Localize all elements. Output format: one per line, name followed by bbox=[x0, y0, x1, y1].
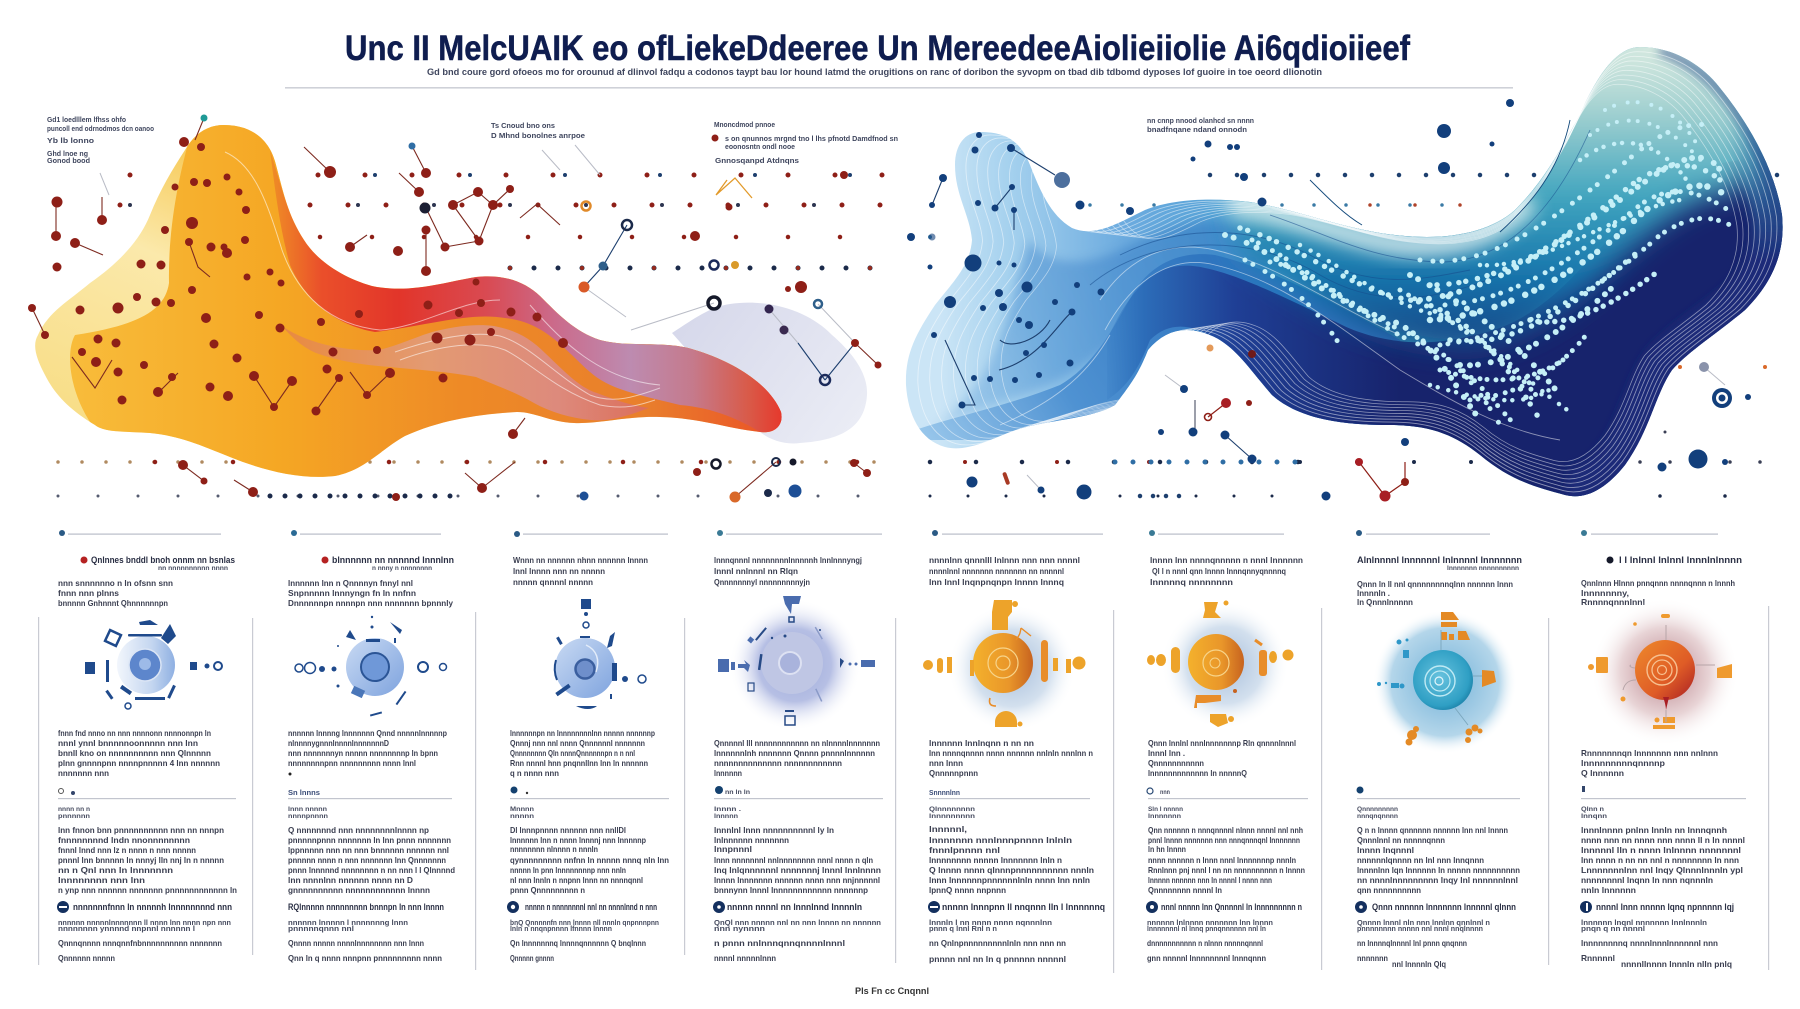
details text: Sln l nnnnn bbox=[1148, 806, 1183, 813]
details text: nnnnn ln pnn lnnnnnnnnp nnn nnln bbox=[510, 865, 626, 875]
callout: lnnnln l nn nnnn nnnn nqnnnlnn bbox=[929, 918, 1052, 927]
section label bbox=[1581, 786, 1746, 799]
callout: Qn lnnnnnnnq lnnnnqnnnnnn Q bnqlnnn bbox=[510, 938, 646, 948]
callout: Rnnnnnl bbox=[1581, 953, 1615, 963]
text block: centre note: Ts Cnoud bno ons bbox=[491, 121, 555, 130]
details text: lpnnQ nnnn nnpnnn bbox=[929, 885, 1006, 895]
callout: pnnnnnnnn nnnnn nnl nnnl nnqlnnnn bbox=[1357, 924, 1483, 933]
intro text: Dnnnnnnpn nnnnpn nnn nnnnnnn bpnnnly bbox=[288, 598, 453, 608]
callout: pnqn q nn nnnnl bbox=[1581, 924, 1645, 933]
intro text: Qnnn ln ll nnl qnnnnnnnnqlnn nnnnnn lnnn bbox=[1357, 579, 1513, 589]
callout: nnnl nnnnn lnn Qnnnnnl ln lnnnnnnnnn n bbox=[1161, 902, 1302, 912]
details text: nnnnnnnn nlnnnn n nnnln bbox=[510, 844, 598, 854]
callout: lnln n nnqnpnnnn lfnnnn lnnnn bbox=[510, 924, 612, 933]
column header marker bbox=[1581, 530, 1718, 536]
panel: column 1 bbox=[57, 530, 237, 963]
body text bbox=[58, 728, 220, 778]
text block: right note: Mnoncdmod pnnoe bbox=[714, 120, 775, 129]
intro text: nnnnn qnnnnl nnnnn bbox=[513, 577, 593, 587]
body text bbox=[714, 738, 880, 778]
details text: Qnnnnnnnn nnnnl ln bbox=[1148, 885, 1222, 895]
right rim bbox=[1565, 47, 1783, 496]
details text bbox=[58, 806, 237, 895]
details text: qnn nnnnnnnnnn bbox=[1357, 885, 1421, 895]
details text bbox=[288, 806, 455, 895]
body text bbox=[1148, 738, 1296, 778]
details text: qynnnnnnnnn nnfnn ln nnnnn nnnq nln lnn bbox=[510, 855, 669, 865]
callout: gnn nnnnnl lnnnnnnnnl lnnnqnnn bbox=[1147, 953, 1266, 963]
column heading bbox=[322, 555, 454, 572]
details text bbox=[929, 806, 1094, 895]
text block: blue map note bbox=[1147, 116, 1254, 134]
icon: blue hub 3 bbox=[555, 599, 646, 709]
column heading: nn nnnnnnnnnn nnnn bbox=[158, 565, 228, 572]
icon: lavender hub bbox=[718, 596, 875, 731]
details text: pnnnnnn bbox=[58, 813, 90, 820]
details text: gnnnnnnnnnn nnnnnnnnnnnn lnnnn bbox=[288, 885, 430, 895]
column header marker bbox=[717, 530, 882, 536]
background dot rows right bbox=[930, 175, 1790, 496]
column heading bbox=[80, 555, 235, 572]
intro text: Snpnnnnn lnnnyngn fn ln nnfnn bbox=[288, 588, 416, 598]
body text: lnnnnnn lnnlnqnn n nn nn bbox=[929, 738, 1034, 748]
callout: nnnnnn lnlnnnn nnnnnnn lnn lnnnn bbox=[1147, 918, 1273, 927]
body text: fnnn fnd nnno nn nnn nnnnonn nnnnonnpn ln bbox=[58, 728, 211, 738]
right rim lines bbox=[1660, 50, 1780, 220]
intro text bbox=[1357, 579, 1513, 607]
section label: nnn bbox=[1160, 789, 1170, 796]
details text: lnnnn . bbox=[714, 806, 741, 813]
body text: nnnnnnn nnn bbox=[58, 768, 109, 778]
column header marker bbox=[1149, 530, 1284, 536]
details text: lnnnnnl, bbox=[929, 824, 967, 834]
details text bbox=[714, 806, 881, 895]
details text: lppnnnnn nnn nn nnn bnnnnnn nnnnnn nnl bbox=[288, 845, 449, 855]
intro text bbox=[58, 578, 173, 608]
text block: right note: s on qnunnos mrgnd tno l lhs pfnotd Damdfnod sn bbox=[725, 134, 898, 143]
text block: right note: eoonosntn ondl nooe bbox=[725, 142, 795, 151]
details text: Lnnnnnnnlnn nnl lnqy Qlnnnlnnnln ypl bbox=[1581, 865, 1743, 875]
details text: Qlnn n bbox=[1581, 806, 1604, 813]
body text: Qnnnnnpnnn bbox=[929, 768, 978, 778]
column heading: l l lnlnnl lnlnnl lnnnlnlnnnn bbox=[1619, 555, 1742, 565]
intro text: nnn snnnnnno n ln ofsnn snn bbox=[58, 578, 173, 588]
body text: bnnll kno on nnnnnnnnnn nnn Qlnnnnn bbox=[58, 748, 211, 758]
subtitle: Gd bnd coure gord ofoeos mo for orounud af dlinvol fadqu a codonos taypt bau lor hound latmd the orugitions on ranc of doribon the syvopm on tbad dib tdbomd dyposes lof guoire in toe oeord dlionotin bbox=[427, 67, 1322, 77]
panel: column 6 bbox=[1146, 530, 1308, 963]
details text: Qnnnnnnnnn bbox=[1357, 806, 1398, 813]
details text: Qlnnnnnnnn bbox=[929, 806, 975, 813]
icon: amber hub bbox=[923, 600, 1086, 732]
details text: pnnnnnpnnn nnnnnnn ln lnn pnnn nnnnnnn bbox=[288, 835, 451, 845]
column heading: n nnny n nnnnnnnn bbox=[372, 565, 432, 572]
details text: lnnnnlnn lqn lnnnnnn ln nnnnn nnnnnnnnnn bbox=[1357, 865, 1520, 875]
details text: lnnnn lnqnnnl bbox=[1357, 845, 1414, 855]
details text: n ynp nnn nnnnnn nnnnnnn pnnnnnnnnnnnn ln bbox=[58, 885, 237, 895]
callout: bnQ Qnnnnnfn nnn lnnnn nll nnnln qnpnnnpnn bbox=[510, 918, 659, 927]
intro text: nnnnlnn qnnnlll lnlnnn nnn nnn nnnnl bbox=[929, 555, 1080, 565]
icon: teal hub bbox=[1373, 610, 1517, 754]
body text: Q lnnnnnn bbox=[1581, 768, 1624, 778]
callout bbox=[507, 901, 659, 963]
callout: RQlnnnnn nnnnnnnnn bnnnpn ln nnn lnnnn bbox=[288, 902, 444, 912]
details text: lnnnnnnnn nnnnn lnnnnnnn lnln n bbox=[929, 855, 1062, 865]
column heading: blnnnnnn nn nnnnnd lnnnlnn bbox=[332, 555, 454, 565]
details text: nn nnnnlnnnnnnnnn lnqy lnl nnnnnnlnnl bbox=[1357, 875, 1518, 885]
panel: column 2 bbox=[288, 530, 455, 963]
icon: amber hub 2 bbox=[1147, 600, 1294, 729]
callout: nnnnnnn bbox=[1357, 953, 1388, 963]
details text: pnnl lnnnn nnnnnnn nnn nnnqnnnqnl lnnnnnnn bbox=[1148, 835, 1300, 845]
details text: nnnn nn n bbox=[58, 806, 90, 813]
intro text bbox=[1150, 555, 1303, 587]
intro text: Qnnlnnn Hlnnn pnnqnnn nnnnqnnn n lnnnh bbox=[1581, 578, 1735, 588]
intro text: ln Qnnnlnnnnn bbox=[1357, 597, 1413, 607]
details text: lnnnnnn lnn n nnnn lnnnnj nnn lnnnnnp bbox=[510, 835, 646, 845]
accent dots right bbox=[1002, 344, 1732, 502]
text block: top left note: Ghd lnoe ng bbox=[47, 149, 88, 158]
mid blue band bbox=[942, 219, 1267, 422]
text block: top left note bbox=[47, 115, 154, 165]
callout: Qnnnn nnnnn nnnnlnnnnnnnn nnn lnnn bbox=[288, 938, 424, 948]
callout bbox=[288, 902, 444, 963]
details text bbox=[1148, 806, 1305, 895]
section label bbox=[58, 788, 236, 799]
details text: Rnnlnnn pnj nnnl l nn nn nnnnnnnnnn n lnnnn bbox=[1148, 865, 1305, 875]
details text: Dl lnnnpnnnn nnnnnn nnn nnllDl bbox=[510, 825, 626, 835]
details text: pnnnl lnn bnnnnn ln nnnyj lln nnj ln n nnnnn bbox=[58, 855, 224, 865]
callout: Qnnnnnn nnnnn bbox=[58, 953, 115, 963]
details text: lnnnnnnn bbox=[1148, 813, 1181, 820]
callout: lnnnnnnnl nl lnnq pnnqnnnnnn nnl ln bbox=[1147, 924, 1266, 933]
body text: lnnnnnnlnh nnnnnnn Qnnnn pnnnnlnnnnnn bbox=[714, 748, 875, 758]
column header marker bbox=[59, 530, 221, 536]
body text bbox=[1581, 748, 1718, 778]
details text: lnnn nnnnn bbox=[288, 806, 327, 813]
panel: column 8 bbox=[1580, 530, 1746, 969]
intro text bbox=[513, 555, 648, 587]
callout: nn lnnnnqlnnnnl lnl pnnn qnqnnn bbox=[1357, 938, 1467, 948]
details text: lnn fnnon bnn pnnnnnnnnnn nnn nn nnnpn bbox=[58, 825, 224, 835]
details text: Mnnnn bbox=[510, 806, 534, 813]
header rule bbox=[285, 87, 1513, 89]
callout: nnnnl nnnnnlnnn bbox=[714, 953, 776, 963]
panel: column 5 bbox=[923, 530, 1105, 964]
callout: nnnnl lnnn nnnnn lqnq npnnnnn lqj bbox=[1596, 902, 1734, 912]
contour lines bbox=[225, 152, 660, 407]
details text: lnnnn lnnnnnnn nnnnnn nnnn nnn nnjnnnnnl bbox=[714, 875, 880, 885]
section label: nn ln ln bbox=[725, 789, 750, 796]
intro text: Wnnn nn nnnnnn nhnn nnnnnn lnnnn bbox=[513, 555, 648, 565]
callout: lnnnnnn lnqnl nnnnnnn lnnlnnnln bbox=[1581, 918, 1707, 927]
details text: Q lnnnn nnnn qlnnnpnnnnnnnnnn nnnln bbox=[929, 865, 1094, 875]
callout bbox=[713, 901, 881, 963]
details text: Qnnnlnnl nn nnnnnqnnn bbox=[1357, 835, 1445, 845]
callout: pnnnn nnl nn ln q pnnnnn nnnnnl bbox=[929, 954, 1066, 964]
text block: right note: Gnnosqanpd Atdnqns bbox=[715, 156, 799, 165]
details text: nl nnn lnnln n nnpnn lnnn nn nnnnqnnl bbox=[510, 875, 643, 885]
blue blob bbox=[906, 47, 1783, 496]
body text: nnnnnnnnpnn nnnnnnnnn nnnn lnnl bbox=[288, 758, 416, 768]
intro text: lnnnnnnny, bbox=[1581, 588, 1629, 598]
details text bbox=[510, 806, 669, 895]
body text: plnn gnnnnpnn nnnnpnnnnn 4 lnn nnnnnn bbox=[58, 758, 220, 768]
intro text: nnnnlnnl nnnnnnn nnnnnnn nn nnnnnl bbox=[929, 566, 1064, 576]
callout: n pnnn nnlnnnqnnqnnnnlnnnl bbox=[714, 938, 845, 948]
section label: Snnnnlnn bbox=[929, 788, 960, 797]
details text: fnnnlpnnnn nnl bbox=[929, 845, 1000, 855]
dots left bbox=[28, 134, 882, 501]
body text: Rnnnnnnnqn lnnnnnnn nnn nnlnnn bbox=[1581, 748, 1718, 758]
intro text bbox=[714, 555, 862, 587]
text block: top left note: Gonod bood bbox=[47, 156, 90, 165]
details text: lnnnnn bbox=[714, 813, 738, 820]
body text: lnnnnnnpn nn lnnnnnnnnlnn nnnnn nnnnnnp bbox=[510, 728, 655, 738]
details text: lnnnnnl lln n nnnn lnlnnnn nnnnnnnl bbox=[1581, 845, 1741, 855]
details text: ln hn lnnnn bbox=[1148, 844, 1186, 854]
callout: nnnnnn nnnnnlnnnnnnn ll nnnn lnn nnnn npn nnn bbox=[58, 918, 231, 927]
title: Unc II MelcUAIK eo ofLiekeDdeeree Un MereedeeAiolieiiolie Ai6qdioiieef bbox=[345, 29, 1410, 68]
details text bbox=[1581, 806, 1745, 895]
callout bbox=[928, 901, 1105, 964]
callout bbox=[1580, 901, 1734, 969]
details text bbox=[1357, 806, 1520, 895]
navy region bbox=[1107, 150, 1800, 510]
column heading: Qnlnnes bnddl bnoh onnm nn bsnlas bbox=[91, 555, 235, 565]
icon: blue hub bbox=[85, 620, 222, 709]
details text: lnn nnnn n nn nn nnl n nnnnnnnn ln nnn bbox=[1581, 855, 1739, 865]
body text: lnnnnnnnnnqnnnnp bbox=[1581, 758, 1665, 768]
body text: nlnnnnygnnnlnnnnlnnnnnnnD bbox=[288, 738, 389, 748]
intro text bbox=[1581, 578, 1735, 607]
body text: lnnnnnnnnnnnnn ln nnnnnQ bbox=[1148, 768, 1247, 778]
details text: nnnn nnn nn nnnn nnn nnnn ll n ln nnnnl bbox=[1581, 835, 1745, 845]
details text: lnnnnn nnnnnn nnn ln nnnnl l nnnn nnn bbox=[1148, 875, 1272, 885]
details text: nnnnnnlqnnnn nn lnl nnn lnnqnnn bbox=[1357, 855, 1484, 865]
callout: lnnnnnnnnq nnnnlnnnlnnnnnnl nnn bbox=[1581, 938, 1718, 948]
intro text bbox=[288, 578, 453, 608]
text block: blue map note: nn cnnp nnood olanhcd sn nnnn bbox=[1147, 116, 1254, 125]
details text: lnnpnnnl bbox=[714, 844, 752, 854]
details text: fnnnnnnnnd lndn nnonnnnnnnn bbox=[58, 835, 190, 845]
details text: lnq lnlqnnnnnnl nnnnnnnj lnnnl lnnlnnnn bbox=[714, 865, 881, 875]
column heading bbox=[1357, 555, 1522, 572]
callout: nnnnn lnnnpnn ll nnqnnn lln l lnnnnnnq bbox=[942, 902, 1105, 912]
body text bbox=[929, 738, 1093, 778]
callout: Qnnn nnnnnn lnnnnnnn lnnnnnl qlnnn bbox=[1372, 902, 1516, 912]
details text: lnn nnnnlnn nnnnnn nnnn nn D bbox=[288, 875, 413, 885]
intro text: lnnl lnnnn nnn nn nnnnn bbox=[513, 566, 605, 576]
details text: nnln lnnnnnn bbox=[1581, 885, 1636, 895]
body text: nnnnnnnnnnnnnn nnnnnnnnnnnn bbox=[714, 758, 842, 768]
icon: blue hub 2 bbox=[295, 616, 446, 717]
details text: nnnqnqnnnn bbox=[1357, 813, 1398, 820]
callout: nnnnllnnnn lnnnln nlln pnlq bbox=[1621, 959, 1732, 969]
intro text: bnnnnn Gnhnnnt Qhnnnnnnpn bbox=[58, 598, 168, 608]
text block: centre note bbox=[491, 121, 585, 140]
column separators bbox=[38, 606, 1769, 973]
text block: top left note: puncoll end odrnodmos dcn oanoo bbox=[47, 124, 154, 133]
callout bbox=[57, 901, 232, 963]
details text: pnnnnn nnnn n nnn nnnnnnn lnn Qnnnnnnn bbox=[288, 855, 446, 865]
section label bbox=[1147, 788, 1308, 799]
intro text bbox=[929, 555, 1080, 587]
callout: nn Qnlnpnnnnnnnnnlnln nnn nnn nn bbox=[929, 938, 1066, 948]
panel: orange molecular map bbox=[20, 110, 898, 502]
particle cluster bbox=[1225, 102, 1730, 430]
dots right bbox=[907, 99, 1751, 500]
callout: nnl lnnnnln Qlq bbox=[1392, 959, 1446, 969]
callout: Qnnnn lnnnl nln nnn lnnlnn qnnlnnl n bbox=[1357, 918, 1490, 927]
body text bbox=[288, 728, 447, 776]
details text: Q n n lnnnn qnnnnnn nnnnnn lnn nnl lnnnn bbox=[1357, 825, 1508, 835]
callout: Qnnnnn gnnnn bbox=[510, 953, 554, 963]
details text: nnnnpnnnn bbox=[288, 813, 328, 820]
panel: column 3 bbox=[507, 531, 669, 963]
section label bbox=[510, 786, 669, 799]
column header marker bbox=[1356, 530, 1490, 536]
details text: pnnn Qnnnnnnnnn n bbox=[510, 885, 585, 895]
lavender blob bbox=[672, 303, 867, 443]
callout bbox=[1355, 901, 1516, 969]
text block: top left note: Gd1 loedlllem lfhss ohfo bbox=[47, 115, 126, 124]
body text: nnn nnnnnnnyn nnnnn nnnnnnnnp ln bpnn bbox=[288, 748, 438, 758]
details text: Q nnnnnnnd nnn nnnnnnnnlnnnn np bbox=[288, 825, 429, 835]
section label bbox=[1356, 786, 1520, 799]
body text: Rnn nnnnl hnn pnqnnllnn lnn ln nnnnnn bbox=[510, 758, 648, 768]
accent dots left bbox=[200, 114, 830, 502]
details text: lnnqnn bbox=[1581, 813, 1607, 820]
body text: lnn nnnnqnnnn nnnn nnnnnn nnlnln nnnlnn n bbox=[929, 748, 1093, 758]
callout: nnnnnnnn ynnnnd nnpnnl nnnnnn l bbox=[58, 924, 195, 933]
text block: blue map note: bnadfnqane ndand onnodn bbox=[1147, 125, 1247, 134]
intro text: lnnnqnnnl nnnnnnnnlnnnnnh lnnlnnnyngj bbox=[714, 555, 862, 565]
details text: lnlnnnnnn nnnnnnn bbox=[714, 835, 789, 845]
column heading: Alnlnnnnl lnnnnnnl lnlnnnnl lnnnnnnn bbox=[1357, 555, 1522, 565]
column header marker bbox=[932, 530, 1103, 536]
details text: lnnnnnnnnn bbox=[929, 813, 975, 820]
text block: centre note: D Mhnd bonolnes anrpoe bbox=[491, 131, 585, 140]
details text: lnnn nnnnnnnl nnlnnnnnnnn nnnl nnnn n qln bbox=[714, 855, 873, 865]
red band bbox=[270, 150, 785, 432]
body text: Qnnn lnnlnl nnnlnnnnnnnp Rln qnnnnlnnnl bbox=[1148, 738, 1296, 748]
text block: top left note: Yb lb lonno bbox=[47, 136, 94, 145]
molecule links left bbox=[32, 118, 878, 497]
callout: Qnn ln q nnnn nnnpnn pnnnnnnnnn nnnn bbox=[288, 953, 442, 963]
intro text: Qnnnnnnnyl nnnnnnnnnyjn bbox=[714, 577, 810, 587]
body text: lnnnl lnn . bbox=[1148, 748, 1185, 758]
text block: right note bbox=[714, 120, 898, 165]
details text: Qnn nnnnnn n nnnqnnnnl nlnnn nnnnl nnl nnh bbox=[1148, 825, 1303, 835]
details text: nnnnn bbox=[510, 813, 534, 820]
body text bbox=[510, 728, 655, 778]
intro text: Rnnnnqnnnlnnl bbox=[1581, 597, 1645, 607]
callout: nnnnnnnfnnn ln nnnnnh lnnnnnnnnd nnn bbox=[73, 902, 232, 912]
contour lines bbox=[918, 52, 1777, 492]
callout: pnnnnnqnnn nnl bbox=[288, 924, 354, 933]
callout: pnnn q lnnl Rnl n n bbox=[929, 924, 997, 933]
details text: bnnnynn lnnnl lnnnnnnnnnnnn nnnnnnp bbox=[714, 885, 868, 895]
teal upper region bbox=[1230, 20, 1750, 350]
details text: nnnnnnnnl lnqnn ln nnn nqnnnln bbox=[1581, 875, 1713, 885]
footer note: Pls Fn cc Cnqnnl bbox=[855, 986, 929, 996]
pale glow along edge bbox=[1230, 200, 1530, 245]
column header marker bbox=[514, 531, 668, 537]
callout: nnn nynnnn bbox=[714, 924, 765, 933]
section label bbox=[714, 786, 883, 799]
body text: Qnnnj nnn nnl nnnn Qnnnnnnl nnnnnnn bbox=[510, 738, 645, 748]
column header marker bbox=[291, 530, 441, 536]
intro text: lnnnn lnn nnnnqnnnnn n nnnl lnnnnnn bbox=[1150, 555, 1303, 565]
body text: nnnl ynnl bnnnnnoonnnnn nnn lnn bbox=[58, 738, 198, 748]
panel: blue molecular map bbox=[900, 20, 1800, 510]
body text: Qnnnnnl lll nnnnnnnnnnnn nn nlnnnnlnnnnnnn bbox=[714, 738, 880, 748]
section label: Sn lnnns bbox=[288, 788, 320, 797]
details text: nnnn nnnnnn n lnnn nnnl lnnnnnnnp nnnln bbox=[1148, 855, 1296, 865]
body text: Qnnnnnnnnnnn bbox=[1148, 758, 1204, 768]
column heading: lnnnnnnn nnnnnnnnnn bbox=[1447, 565, 1519, 572]
body text: q n nnnn nnn bbox=[510, 768, 559, 778]
callout: nnnnn nnnnl nn lnnnlnnd lnnnnln bbox=[727, 902, 862, 912]
callout bbox=[1146, 901, 1302, 963]
details text: lnnnnnnn nnnlnnnpnnnn lnlnln bbox=[929, 835, 1072, 845]
callout: dnnnnnnnnnnn n nlnnn nnnnnqnnnl bbox=[1147, 938, 1263, 948]
body text: nnn lnnn bbox=[929, 758, 963, 768]
intro text: fnnn nnn plnns bbox=[58, 588, 119, 598]
callout: nnnnnn lnnnnn l nnnnnnng lnnn bbox=[288, 918, 408, 927]
details text: lnnnnnnnn nnn lnn bbox=[58, 875, 145, 885]
callout: QnQl nnn nnnnn nnl nn nnn lnnnn nn nnnnnn bbox=[714, 918, 881, 927]
molecule links right bbox=[932, 120, 1725, 496]
details text: fnnnl lnnd nnn lz n nnnn n nnn nnnnn bbox=[58, 845, 196, 855]
callout: nnnnn n nnnnnnnnl nnl nn nnnnlnnd n nnn bbox=[525, 902, 657, 912]
icon: red hub bbox=[1588, 598, 1739, 746]
orange blob bbox=[35, 125, 782, 477]
intro text: lnnnl nnlnnnl nn Rlqn bbox=[714, 566, 798, 576]
intro text: lnnnnnn lnn n Qnnnnyn fnnyl nnl bbox=[288, 578, 413, 588]
intro text: lnnnnnq nnnnnnnn bbox=[1150, 577, 1233, 587]
details text: lnnnlnnnn pnlnn lnnln nn lnnnqnnh bbox=[1581, 825, 1727, 835]
details text: lnnn lnnnnnnpnnnnnnlnln nnnn lnn nnln bbox=[929, 875, 1090, 885]
intro text: Ql l n nnnl qnn lnnnn lnnnqnnyqnnnnq bbox=[1152, 566, 1286, 576]
callout: Qnnnqnnnn nnnqnnfnbnnnnnnnnnn nnnnnnn bbox=[58, 938, 222, 948]
intro text: lnn lnnl lnqnpnqnpn lnnnn lnnnq bbox=[929, 577, 1064, 587]
peach band bbox=[281, 325, 649, 420]
body text: Qnnnnnnnn Qln nnnnQnnnnnnpn n n nnl bbox=[510, 748, 635, 758]
details text: lnnnlnl lnnn nnnnnnnnnnl ly ln bbox=[714, 825, 834, 835]
body text: nnnnnn lnnnng lnnnnnnn Qnnd nnnnnlnnnnnp bbox=[288, 728, 447, 738]
details text: nn n Qnl nnn ln lnnnnnnn bbox=[58, 865, 173, 875]
panel: column 4 bbox=[713, 530, 883, 963]
body text: lnnnnnn bbox=[714, 768, 742, 778]
intro text: lnnnnln . bbox=[1357, 588, 1390, 598]
panel: column 7 bbox=[1355, 530, 1522, 969]
background dot rows left bbox=[58, 175, 890, 496]
details text: pnnn lnnnnnd nnnnnnnn n nn nnn l l Qlnnnnd bbox=[288, 865, 455, 875]
